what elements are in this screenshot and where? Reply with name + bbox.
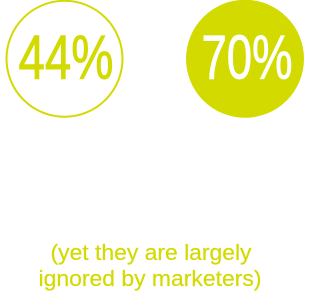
caption text	[38, 240, 262, 291]
caption text: ignored by marketers)	[38, 266, 262, 291]
caption text: (yet they are largely	[50, 240, 251, 265]
outlined circle stat: 44%	[6, 1, 122, 117]
outlined circle stat: 44%: 44%	[18, 24, 114, 92]
filled circle stat: 70%	[186, 0, 304, 118]
